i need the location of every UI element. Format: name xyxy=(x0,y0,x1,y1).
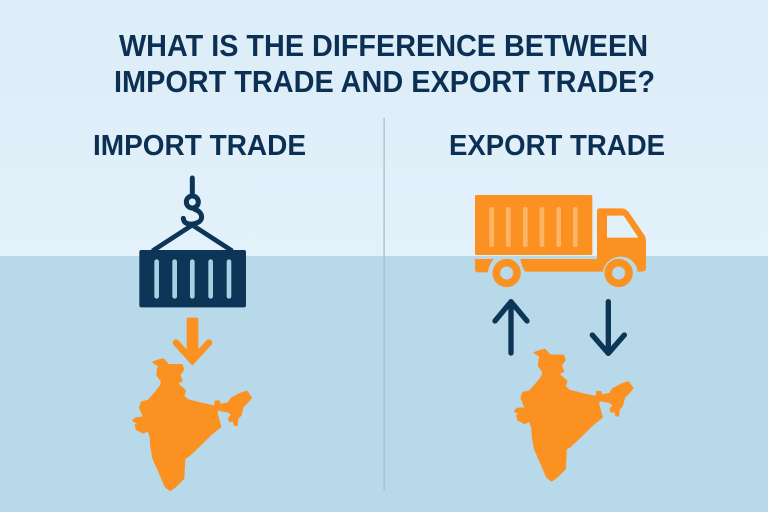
front wheel xyxy=(608,263,629,283)
rear bumper xyxy=(475,259,494,272)
title xyxy=(114,28,655,99)
cargo box xyxy=(475,195,592,255)
background: lower water band xyxy=(0,256,768,512)
heading: export trade: EXPORT TRADE xyxy=(449,130,665,162)
sling ropes xyxy=(152,225,232,251)
title: WHAT IS THE DIFFERENCE BETWEEN xyxy=(119,28,648,63)
arrow: navy down xyxy=(592,302,624,353)
arrow: orange down into India xyxy=(176,318,209,361)
icon: orange container truck xyxy=(475,195,646,283)
map: India, import side xyxy=(133,359,251,490)
title: IMPORT TRADE AND EXPORT TRADE? xyxy=(114,64,655,99)
hook xyxy=(183,196,202,224)
cargo slits xyxy=(489,207,578,247)
background: upper sky band xyxy=(0,0,768,257)
rear wheel xyxy=(496,263,517,283)
arrow: navy up xyxy=(495,302,527,353)
container body xyxy=(139,250,246,307)
icon: container hanging from crane hook xyxy=(139,178,246,307)
container slits xyxy=(154,259,231,299)
panel divider xyxy=(384,118,385,490)
crane cable xyxy=(185,178,200,195)
heading: import trade: IMPORT TRADE xyxy=(93,130,306,162)
map: India, export side xyxy=(515,350,632,480)
cab and chassis xyxy=(520,208,646,272)
